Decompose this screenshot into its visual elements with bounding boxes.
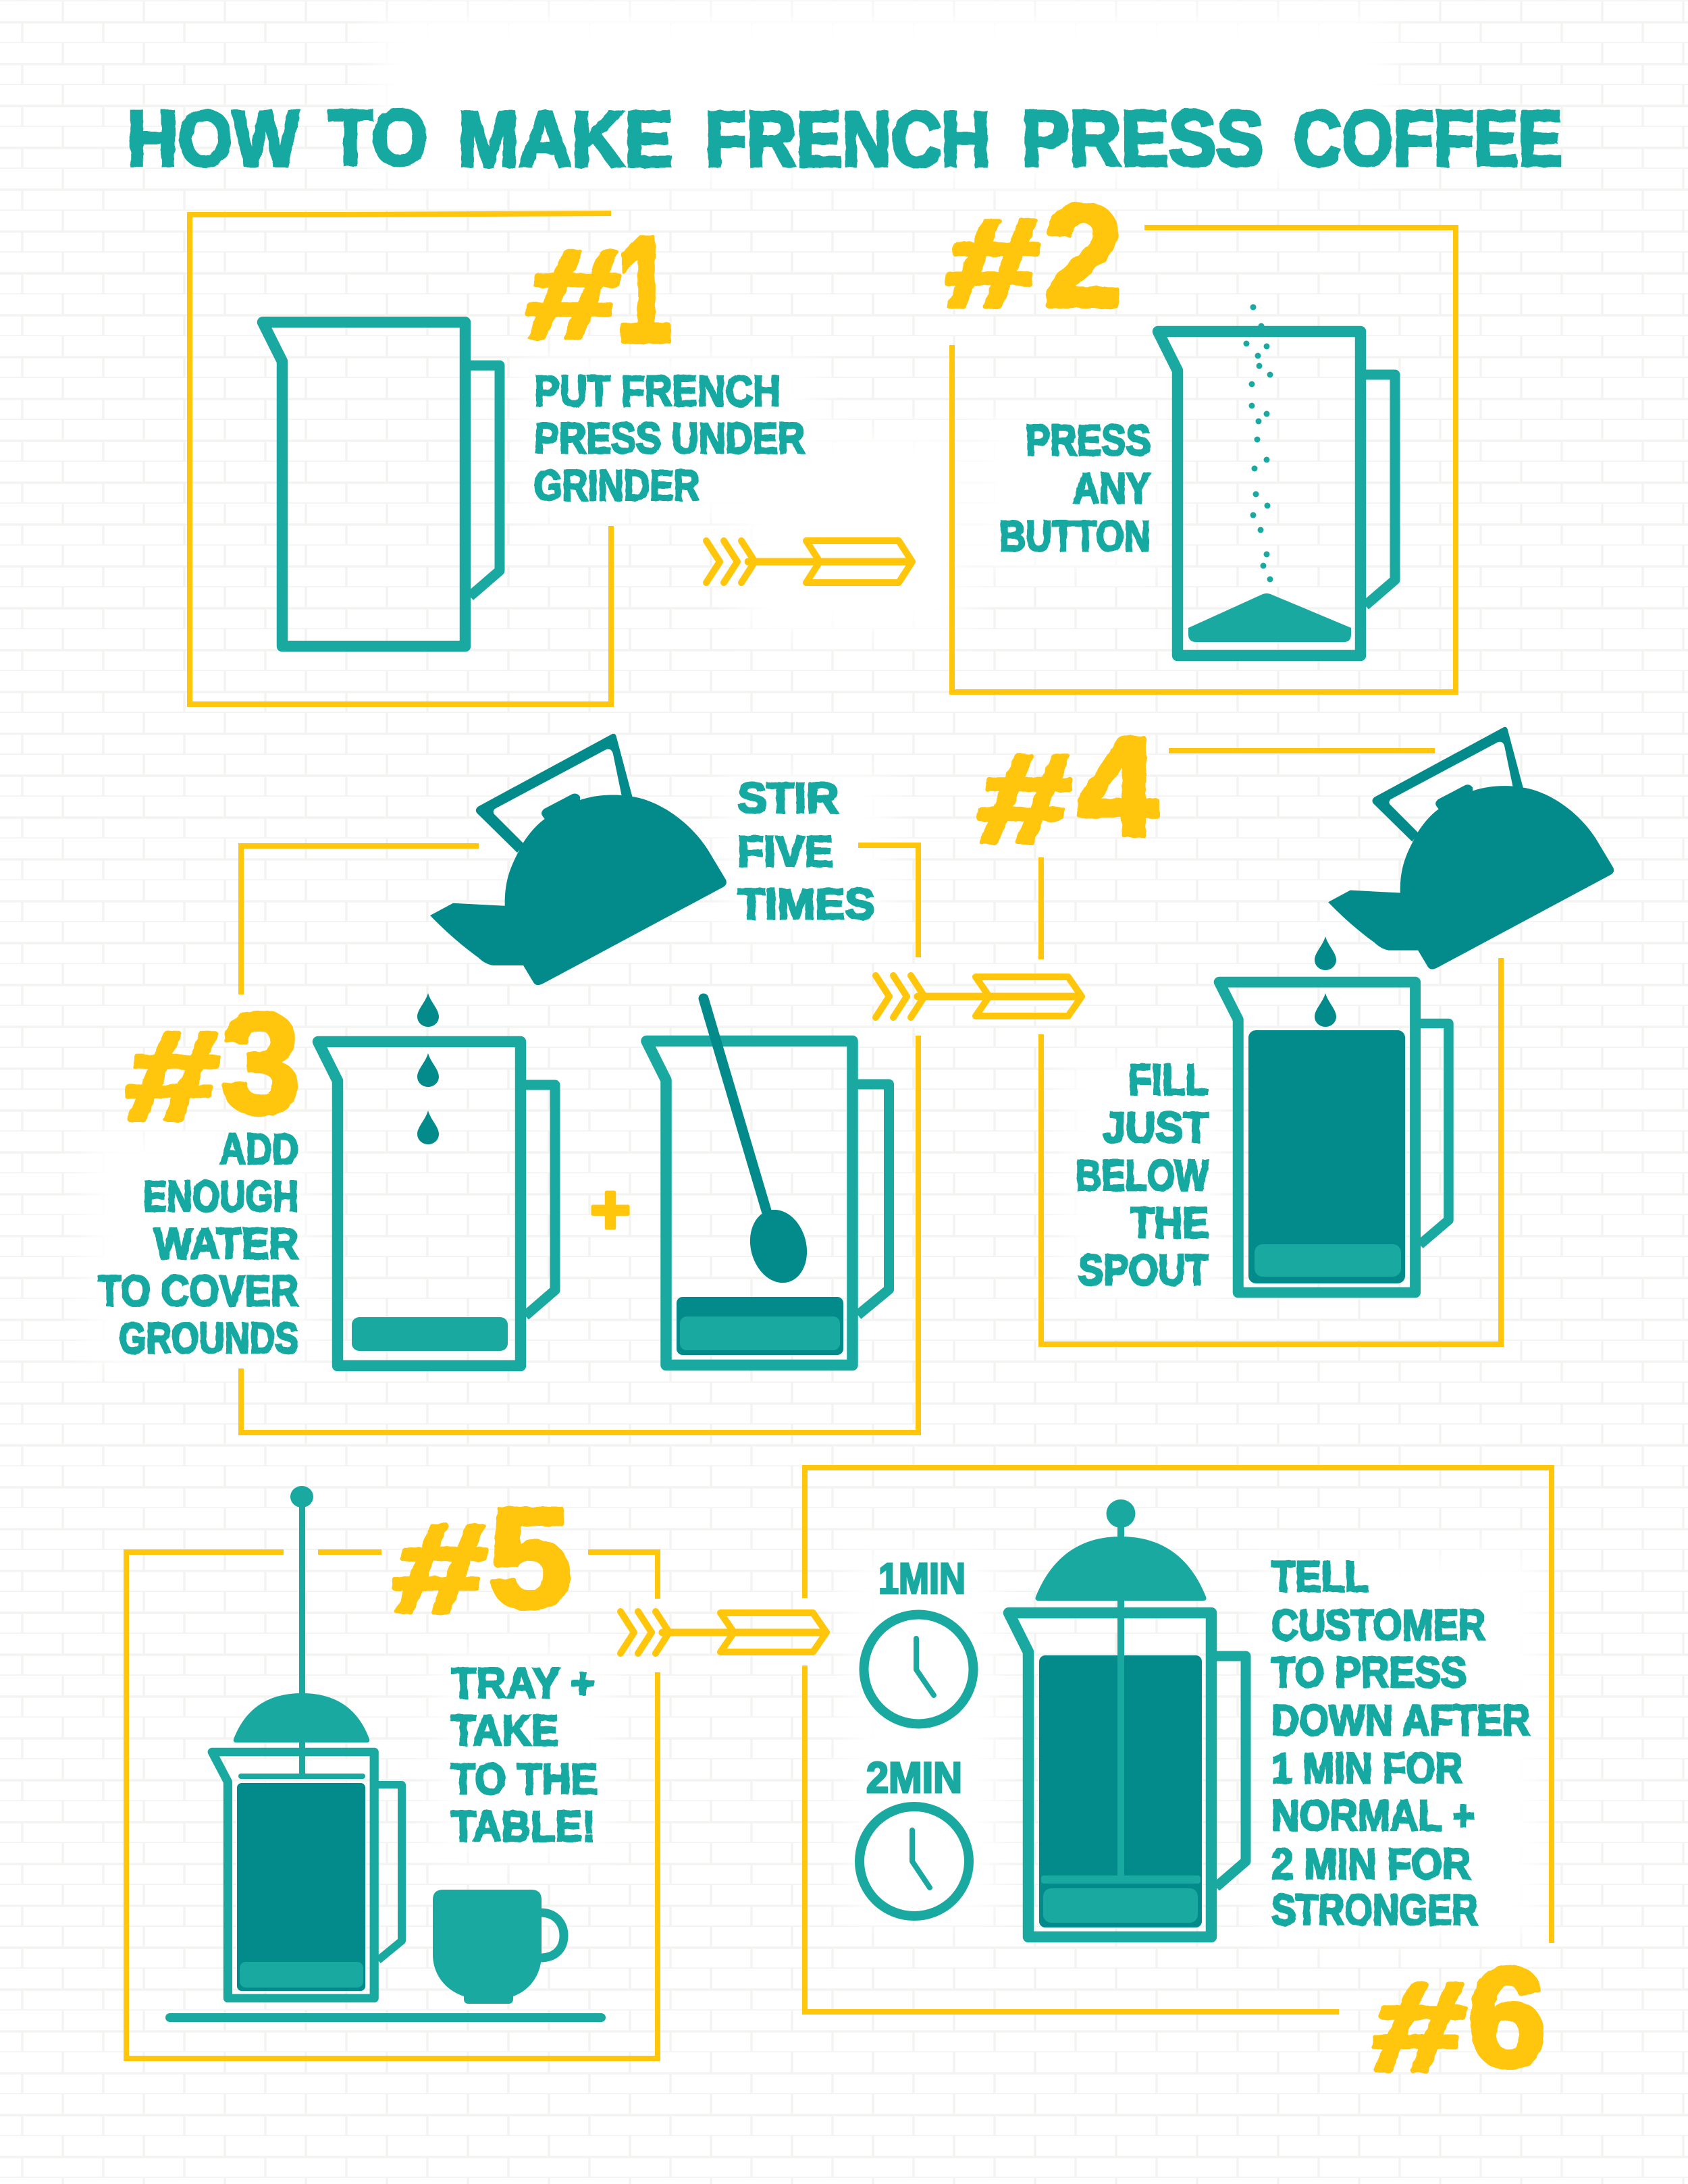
panel: step 4	[970, 709, 1614, 1344]
text: step 2 instruction	[999, 416, 1151, 560]
text: step 6 instruction: CUSTOMER	[1271, 1601, 1485, 1649]
text: step 6 instruction: NORMAL +	[1271, 1791, 1475, 1840]
text: step 2 instruction: PRESS	[1026, 416, 1151, 464]
text: stir instruction: STIR	[737, 774, 839, 822]
title	[127, 94, 1562, 183]
text: step 2 instruction: ANY	[1073, 464, 1151, 512]
frame: step 5	[126, 1552, 658, 2058]
text: add water instruction: ENOUGH	[143, 1172, 298, 1221]
text: stir instruction: FIVE	[737, 827, 833, 876]
icon: tray	[165, 2013, 606, 2022]
frame: step 6	[805, 1468, 1552, 2012]
frame: step 2	[952, 228, 1456, 692]
icon: french press with raised plunger	[212, 1486, 402, 1998]
text: stir instruction	[737, 774, 875, 928]
text: step 4 instruction	[1076, 1055, 1209, 1294]
text: step 2 instruction: BUTTON	[999, 512, 1151, 560]
label: 1 minute: 1MIN	[878, 1554, 966, 1603]
title: HOW	[127, 95, 299, 182]
step number 2: #	[938, 193, 1047, 334]
frame: step 1	[190, 213, 611, 704]
panel: step 5	[126, 1479, 658, 2058]
icon: coffee mug	[433, 1890, 564, 2004]
icon: clock 1 minute	[864, 1615, 974, 1724]
title: FRENCH	[705, 95, 991, 183]
text: step 5 instruction: TABLE!	[451, 1802, 596, 1850]
step number 1: #	[519, 224, 628, 365]
step number 5: #	[386, 1498, 495, 1639]
text: add water instruction: GROUNDS	[119, 1314, 298, 1362]
icon: french press with plunger	[1009, 1499, 1246, 1937]
text: step 6 instruction: TO PRESS	[1271, 1648, 1467, 1697]
step number 6	[1365, 1940, 1546, 2097]
text: add water instruction: TO COVER	[98, 1267, 298, 1315]
text: step 5 instruction	[451, 1659, 598, 1850]
text: add water instruction: WATER	[154, 1219, 298, 1268]
frame: step 3	[241, 845, 918, 1433]
step number 5	[386, 1479, 571, 1639]
title: COFFEE	[1294, 95, 1562, 182]
step number 4: #	[970, 728, 1080, 869]
icon: clock 2 minutes	[860, 1807, 969, 1916]
arrow: step 3 to step 4	[876, 976, 1082, 1017]
text: step 6 instruction: TELL	[1271, 1552, 1369, 1601]
step number 3: 3	[221, 984, 300, 1142]
text: step 5 instruction: TO THE	[451, 1755, 598, 1803]
title: PRESS	[1022, 95, 1264, 182]
step number 3: #	[118, 1006, 228, 1146]
text: add water instruction	[98, 1125, 298, 1362]
text: step 6 instruction: DOWN AFTER	[1271, 1696, 1530, 1744]
title: TO	[328, 94, 428, 182]
step number 4	[970, 709, 1157, 869]
text: step 6 instruction	[1271, 1552, 1530, 1934]
text: stir instruction: TIMES	[737, 880, 875, 928]
icon: french press filled with water	[1219, 936, 1448, 1293]
step number 1: 1	[616, 206, 672, 373]
text: step 1 instruction: GRINDER	[534, 461, 700, 510]
text: step 4 instruction: JUST	[1103, 1103, 1209, 1152]
text: step 5 instruction: TAKE	[451, 1706, 558, 1755]
panel: step 1	[190, 206, 805, 704]
step number 3	[118, 984, 300, 1146]
label: 2 minutes: 2MIN	[866, 1753, 962, 1802]
step number 2	[938, 176, 1122, 337]
step number 4: 4	[1078, 709, 1157, 865]
text: step 1 instruction: PUT FRENCH	[534, 367, 781, 415]
arrow: step 5 to step 6	[621, 1612, 826, 1653]
text: step 1 instruction	[534, 367, 805, 510]
text: step 6 instruction: STRONGER	[1271, 1886, 1478, 1934]
plus sign: +	[590, 1171, 631, 1249]
icon: kettle pouring	[1328, 727, 1614, 969]
text: step 1 instruction: PRESS UNDER	[534, 414, 805, 462]
arrow: step 1 to step 2	[706, 541, 912, 583]
icon: jug being stirred with spoon	[647, 998, 889, 1365]
step number 6: #	[1365, 1956, 1474, 2097]
text: step 4 instruction: FILL	[1128, 1055, 1209, 1104]
icon: french press with falling grounds	[1158, 304, 1395, 656]
text: step 6 instruction: 1 MIN FOR	[1271, 1744, 1462, 1792]
text: step 4 instruction: THE	[1130, 1198, 1209, 1247]
text: add water instruction: ADD	[219, 1125, 298, 1173]
title: MAKE	[458, 95, 673, 183]
step number 1	[519, 206, 672, 373]
icon: empty french press	[263, 322, 500, 646]
text: step 4 instruction: BELOW	[1076, 1151, 1209, 1200]
panel: step 6	[805, 1468, 1552, 2097]
text: step 5 instruction: TRAY +	[451, 1659, 595, 1707]
step number 2: 2	[1044, 176, 1122, 337]
step number 5: 5	[489, 1479, 571, 1637]
panel: step 3	[98, 734, 918, 1433]
icon: jug with grounds and water drops	[318, 993, 555, 1366]
text: step 6 instruction: 2 MIN FOR	[1271, 1840, 1471, 1888]
text: step 4 instruction: SPOUT	[1078, 1246, 1209, 1294]
icon: kettle pouring	[430, 734, 727, 985]
step number 6: 6	[1468, 1940, 1546, 2096]
frame: step 4	[1041, 751, 1501, 1344]
panel: step 2	[938, 176, 1456, 692]
